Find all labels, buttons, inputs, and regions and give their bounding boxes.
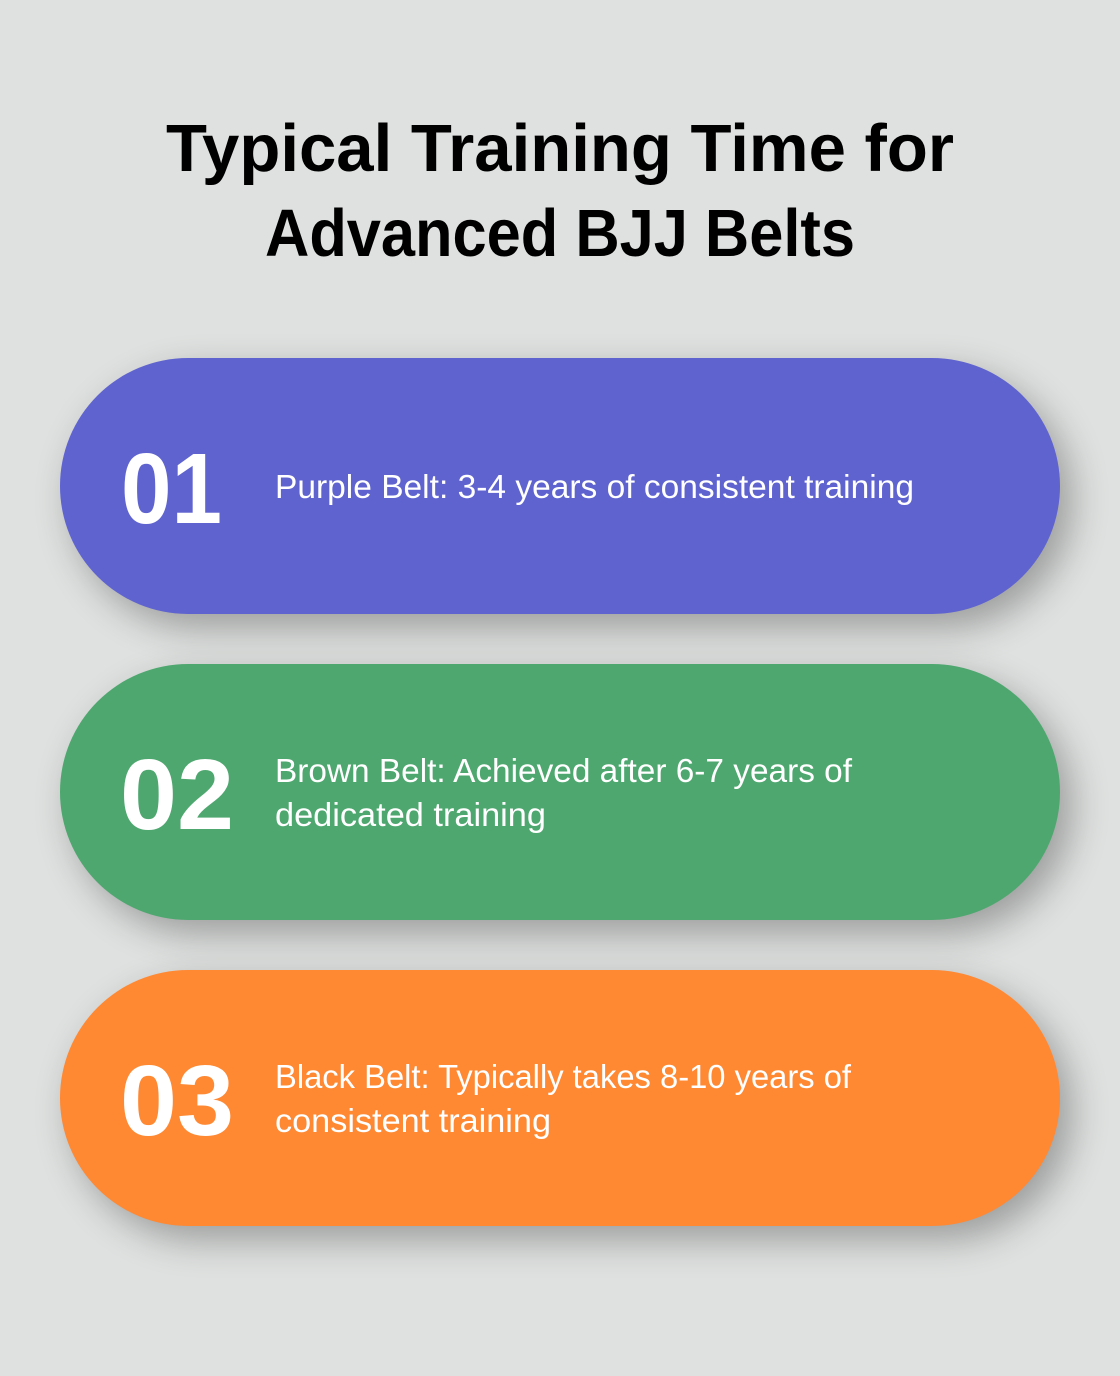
title: Advanced BJJ Belts xyxy=(265,196,855,271)
number 01: 01 xyxy=(121,433,222,545)
number 03: 03 xyxy=(120,1045,234,1157)
text: black belt: consistent training xyxy=(275,1102,551,1139)
title: Typical Training Time for xyxy=(166,111,954,186)
text: black belt xyxy=(275,1058,852,1139)
title xyxy=(166,111,954,271)
number 02: 02 xyxy=(120,739,234,851)
text: brown belt: Brown Belt: Achieved after 6-7 years of xyxy=(275,752,853,789)
text: purple belt: Purple Belt: 3-4 years of consistent training xyxy=(275,468,914,505)
text: black belt: Black Belt: Typically takes 8-10 years of xyxy=(275,1058,852,1095)
text: brown belt xyxy=(275,752,853,833)
text: brown belt: dedicated training xyxy=(275,796,546,833)
panel: black belt xyxy=(60,970,1060,1226)
panel: purple belt xyxy=(60,358,1060,614)
panel: brown belt xyxy=(60,664,1060,920)
